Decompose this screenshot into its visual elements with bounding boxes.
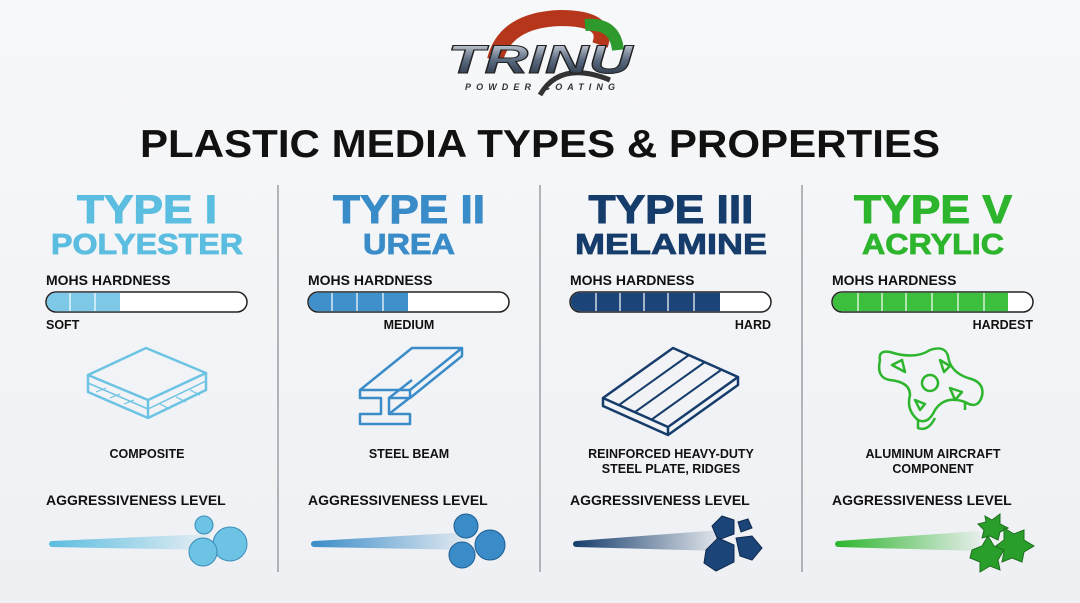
hardness bar	[46, 292, 247, 312]
panel: type II urea: MOHS HARDNESS	[308, 272, 432, 288]
panel: type V acrylic	[832, 188, 1034, 572]
hardness bar	[570, 292, 771, 312]
icon: steel beam	[360, 348, 462, 424]
aggressiveness bar with star crystals	[835, 514, 1034, 572]
panel: type I polyester: TYPE I	[77, 188, 217, 232]
aggressiveness bar with spheres	[49, 516, 247, 566]
panel: type I polyester: MOHS HARDNESS	[46, 272, 170, 288]
icon: composite block	[88, 348, 206, 418]
panel: type V acrylic: ALUMINUM AIRCRAFT	[866, 447, 1001, 461]
logo: TRINU	[448, 38, 634, 82]
panel: type III melamine: REINFORCED HEAVY-DUTY	[588, 447, 755, 461]
panel: type III melamine: MOHS HARDNESS	[570, 272, 694, 288]
icon: ridged steel plate	[603, 348, 738, 435]
panel: type I polyester	[46, 188, 247, 566]
panel: type V acrylic: HARDEST	[973, 318, 1033, 332]
panel: type V acrylic: AGGRESSIVENESS LEVEL	[832, 492, 1012, 508]
panel: type II urea: STEEL BEAM	[369, 447, 449, 461]
panel: type V acrylic: COMPONENT	[892, 462, 974, 476]
hardness bar	[832, 292, 1033, 312]
panel: type III melamine: TYPE III	[588, 188, 754, 232]
icon: aircraft component	[879, 348, 982, 429]
aggressiveness bar with pellets	[311, 514, 505, 568]
panel: type II urea	[308, 188, 509, 568]
panel: type II urea: TYPE II	[333, 188, 485, 232]
panel: type I polyester: SOFT	[46, 318, 80, 332]
panel: type III melamine: AGGRESSIVENESS LEVEL	[570, 492, 750, 508]
panel: type I polyester: AGGRESSIVENESS LEVEL	[46, 492, 226, 508]
panel: type I polyester: POLYESTER	[51, 229, 243, 261]
aggressiveness bar with angular grains	[573, 516, 762, 571]
logo: POWDER COATING	[465, 82, 615, 92]
panel: type II urea: UREA	[363, 229, 455, 261]
hardness bar	[308, 292, 509, 312]
panel: type III melamine: STEEL PLATE, RIDGES	[602, 462, 740, 476]
panel: type II urea: MEDIUM	[384, 318, 434, 332]
panel: type III melamine	[570, 188, 771, 571]
panel: type V acrylic: MOHS HARDNESS	[832, 272, 956, 288]
panel: type V acrylic: ACRYLIC	[862, 229, 1004, 261]
panel: type I polyester: COMPOSITE	[109, 447, 185, 461]
panel: type III melamine: HARD	[735, 318, 771, 332]
panel: type V acrylic: TYPE V	[854, 188, 1012, 232]
logo	[448, 18, 634, 95]
panel: type II urea: AGGRESSIVENESS LEVEL	[308, 492, 488, 508]
panel: type III melamine: MELAMINE	[575, 229, 767, 261]
title: PLASTIC MEDIA TYPES & PROPERTIES	[140, 123, 940, 166]
